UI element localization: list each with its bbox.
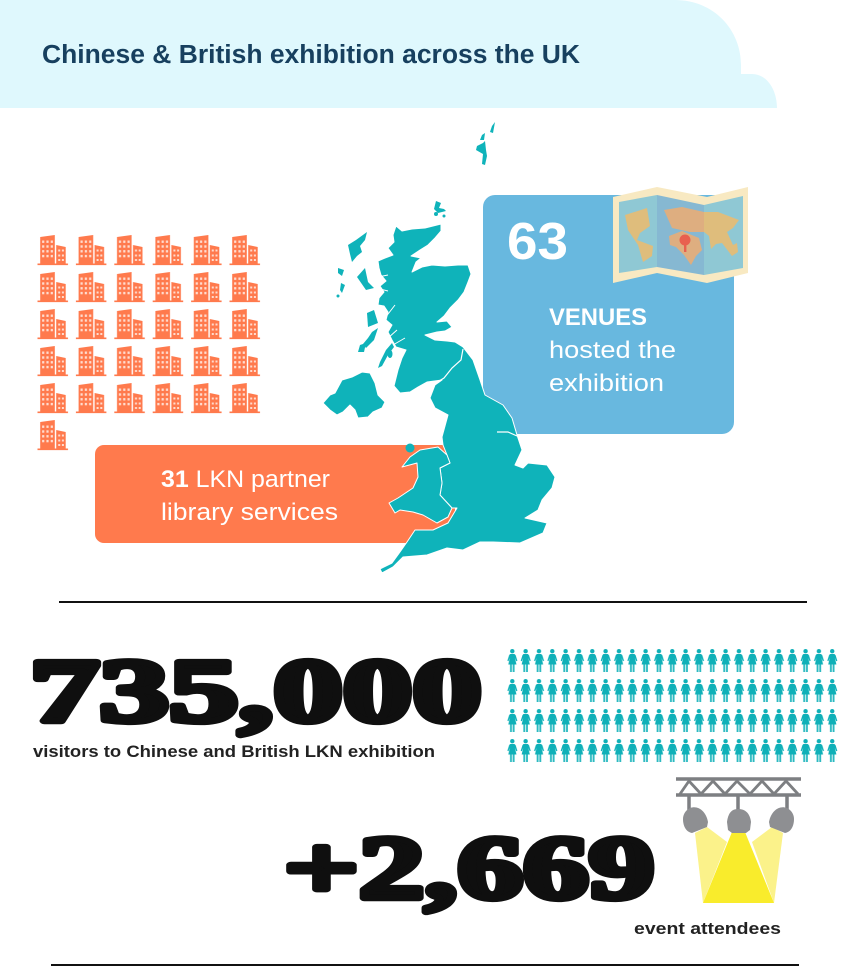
panel: partner libraries bbox=[95, 445, 455, 543]
map of the UK bbox=[323, 122, 555, 573]
Northern Ireland bbox=[323, 372, 385, 418]
divider bbox=[51, 964, 799, 966]
attendees caption: event attendees bbox=[634, 919, 781, 938]
visitors caption: visitors to Chinese and British LKN exhibition bbox=[33, 742, 435, 761]
Wales bbox=[389, 447, 452, 523]
partner libraries text: 31 LKN partner bbox=[161, 466, 330, 493]
attendees number: +2,669 bbox=[284, 819, 655, 918]
icon: stage lights bbox=[676, 779, 801, 903]
buildings pictogram bbox=[37, 235, 267, 452]
venues number: 63 bbox=[507, 213, 568, 271]
sea lochs bbox=[376, 275, 405, 345]
partner libraries text bbox=[161, 466, 338, 526]
title: Chinese & British exhibition across the UK bbox=[42, 41, 581, 69]
Scottish islands bbox=[336, 122, 495, 368]
venues text: hosted the bbox=[549, 337, 676, 364]
Anglesey bbox=[406, 444, 414, 452]
visitors number: 735,000 bbox=[30, 642, 482, 741]
venues text bbox=[549, 304, 676, 397]
panel: venues bbox=[483, 195, 734, 434]
Great Britain: Scotland and England bbox=[378, 224, 555, 573]
England and Scotland border bbox=[436, 349, 463, 383]
Humber inlet bbox=[497, 432, 517, 436]
divider bbox=[59, 601, 807, 603]
partner libraries text: library services bbox=[161, 499, 338, 526]
people pictogram bbox=[506, 649, 839, 769]
icon: folded world map bbox=[613, 187, 748, 283]
venues text: exhibition bbox=[549, 370, 664, 397]
header cloud bbox=[0, 0, 777, 108]
venues text: VENUES bbox=[549, 304, 647, 331]
